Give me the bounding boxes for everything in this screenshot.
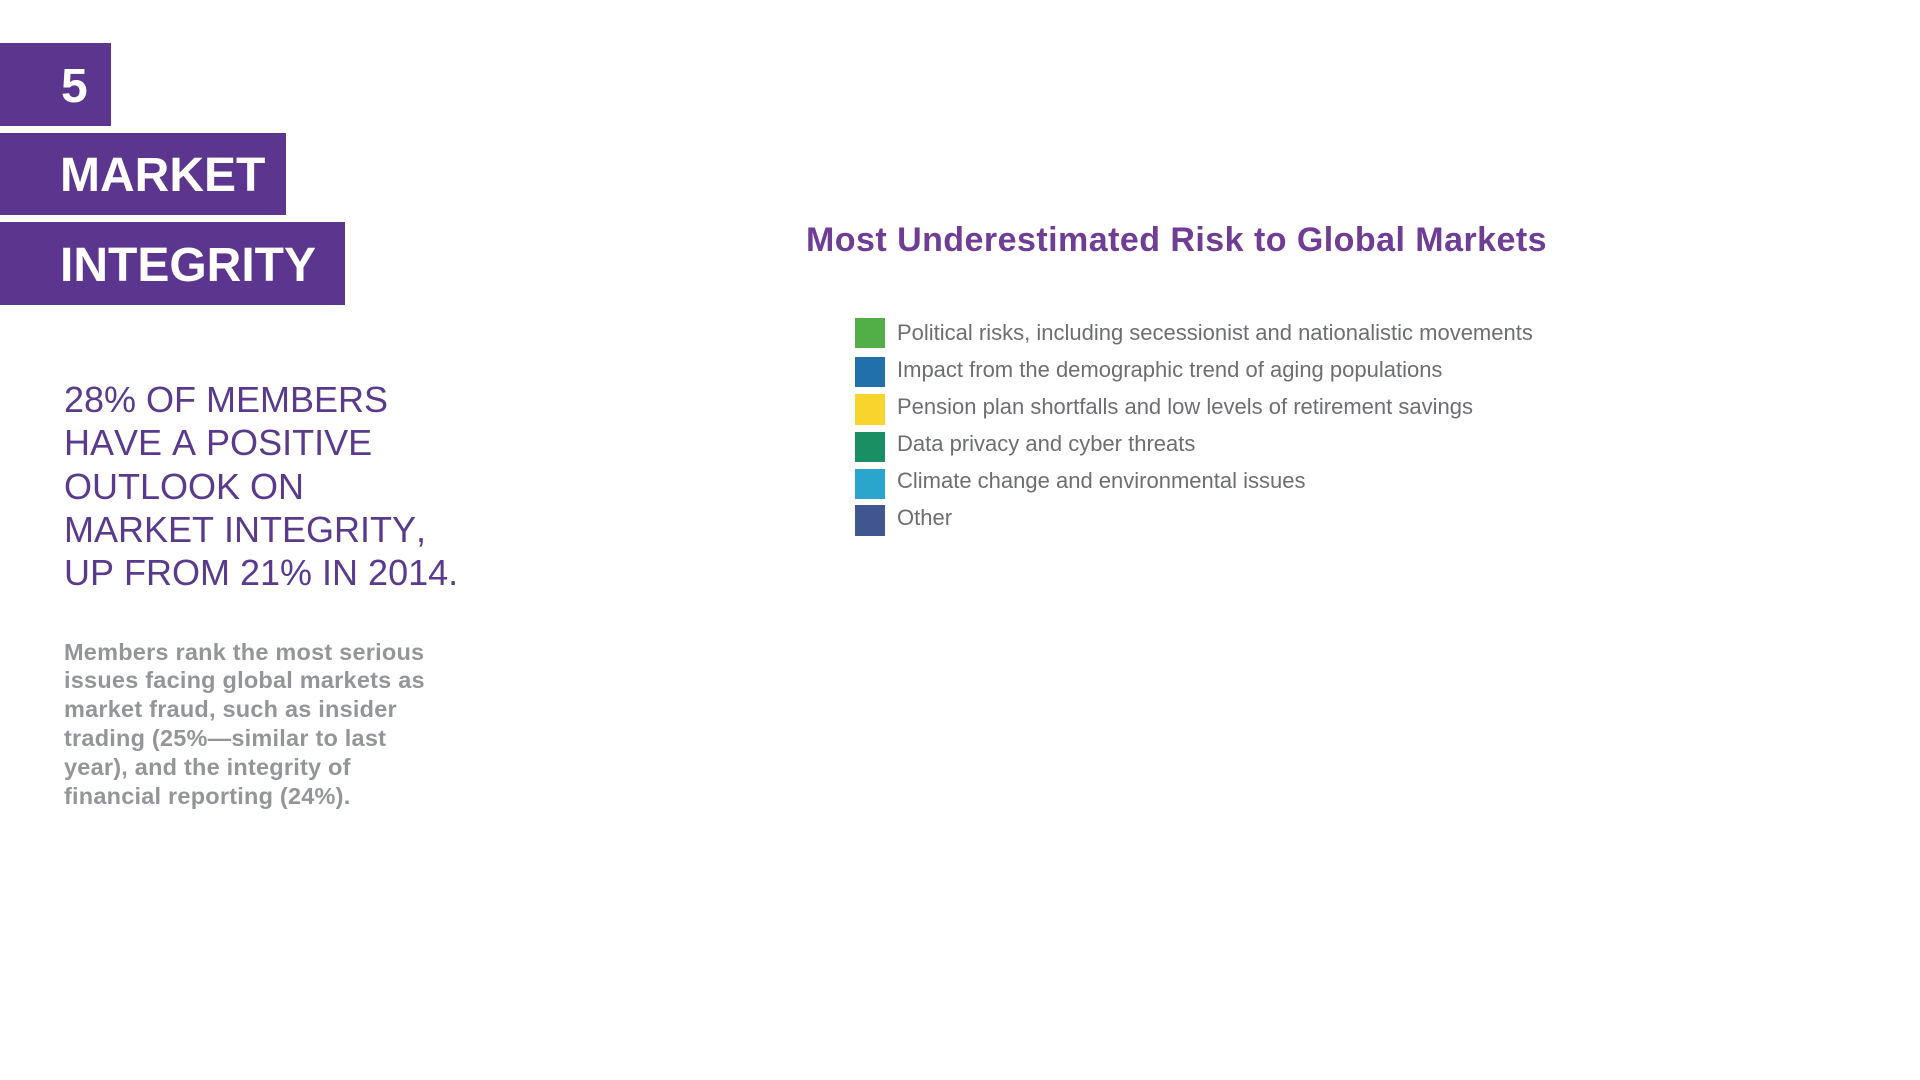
section number bar bbox=[0, 43, 111, 126]
legend label: demographic: Impact from the demographic trend of aging populations bbox=[897, 356, 1442, 382]
legend label: political: Political risks, including secessionist and nationalistic movements bbox=[897, 320, 1533, 344]
legend swatch: data privacy bbox=[855, 432, 885, 462]
key statistic heading: UP FROM 21% IN 2014. bbox=[64, 552, 458, 593]
legend swatch: climate bbox=[855, 469, 885, 499]
body text: Members rank the most serious bbox=[64, 638, 424, 664]
key statistic heading: OUTLOOK ON bbox=[64, 466, 304, 507]
body text: market fraud, such as insider bbox=[64, 696, 397, 722]
legend bbox=[855, 318, 1533, 536]
body text: year), and the integrity of bbox=[64, 754, 351, 780]
key statistic heading: HAVE A POSITIVE bbox=[64, 422, 372, 463]
key statistic heading: MARKET INTEGRITY, bbox=[64, 509, 426, 550]
legend swatch: pension bbox=[855, 394, 885, 425]
chart title: Most Underestimated Risk to Global Markets bbox=[806, 221, 1547, 259]
section number bar: 5 bbox=[61, 60, 88, 113]
title bar: market: MARKET bbox=[60, 149, 265, 202]
body text: financial reporting (24%). bbox=[64, 783, 350, 809]
key statistic heading: 28% OF MEMBERS bbox=[64, 379, 388, 420]
key statistic heading bbox=[64, 379, 458, 593]
legend swatch: political bbox=[855, 318, 885, 348]
title bar: integrity bbox=[0, 222, 345, 305]
body text bbox=[64, 638, 425, 809]
legend label: data privacy: Data privacy and cyber threats bbox=[897, 430, 1195, 456]
legend label: other: Other bbox=[897, 504, 952, 530]
title bar: market bbox=[0, 133, 286, 215]
title bar: integrity: INTEGRITY bbox=[60, 239, 316, 292]
legend label: pension: Pension plan shortfalls and low levels of retirement savings bbox=[897, 394, 1473, 418]
body text: trading (25%—similar to last bbox=[64, 725, 386, 751]
body text: issues facing global markets as bbox=[64, 667, 425, 693]
legend swatch: other bbox=[855, 505, 885, 536]
legend swatch: demographic bbox=[855, 357, 885, 387]
legend label: climate: Climate change and environmental issues bbox=[897, 468, 1305, 492]
